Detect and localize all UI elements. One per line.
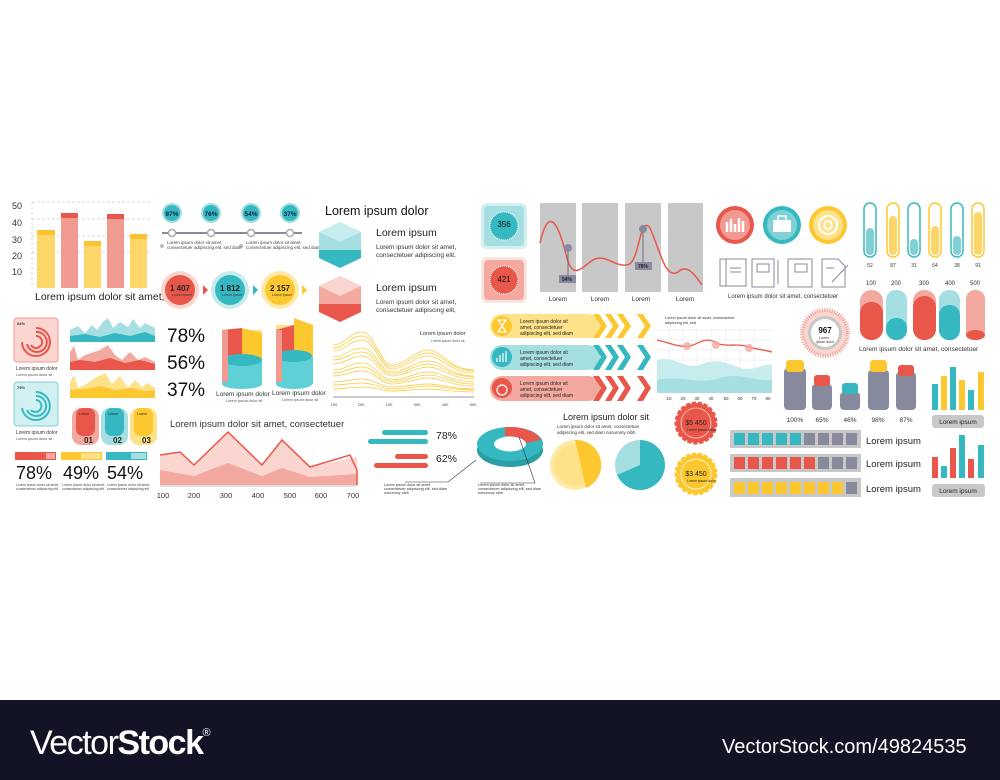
pill bar chart: Lorem ipsum dolor sit amet, consectetuer	[859, 346, 979, 353]
timeline percentages: 54%	[244, 211, 258, 218]
hexagon cubes: Lorem ipsum	[376, 227, 437, 239]
stacked cylinders: 46%	[843, 417, 857, 424]
3d cylinders: Lorem ipsum dolor sit	[282, 398, 319, 402]
pies: Lorem ipsum dolor sit	[563, 412, 650, 422]
grid line chart: Lorem ipsum dolor sit amet, consectetuer	[665, 316, 735, 320]
block progress rows: Lorem ipsum	[866, 484, 921, 495]
3d donut: Lorem ipsum dolor sit amet,	[478, 483, 525, 487]
area line chart bottom: 600	[315, 491, 327, 500]
3d donut: consectetuer adipiscing elit, sed diam	[384, 487, 447, 491]
bar chart: top left: 50	[12, 201, 22, 211]
3d cylinders	[216, 318, 327, 403]
area line chart bottom: 100	[157, 491, 169, 500]
hexagon cubes: Lorem ipsum dolor sit amet,	[376, 299, 456, 306]
block progress rows: Lorem ipsum	[866, 459, 921, 470]
progress bars bottom left: consectetuer adipiscing elit	[16, 487, 58, 491]
arrow rows: Lorem ipsum dolor sit	[520, 319, 568, 325]
price seals: $3 450	[685, 471, 707, 478]
test tubes: 91	[975, 263, 981, 269]
progress bars bottom left: Lorem ipsum dolor sit amet,	[62, 483, 105, 487]
tags 01 02 03: 01	[84, 436, 93, 445]
967 badge: 967	[818, 326, 832, 335]
gray column wave chart: 54%	[562, 277, 573, 283]
area line chart bottom: 300	[220, 491, 232, 500]
number circles 1407 1812 2157: Lorem ipsum	[272, 293, 292, 297]
test tubes	[864, 203, 984, 269]
area line chart bottom: 700	[347, 491, 359, 500]
wave line chart	[331, 331, 477, 407]
tags 01 02 03: Lorem	[137, 412, 147, 416]
hexagon cubes	[319, 222, 456, 322]
bar chart: top left: Lorem ipsum dolor sit amet,	[35, 291, 165, 303]
badge boxes 356 421: 421	[497, 275, 511, 284]
grid line chart: 40	[708, 396, 714, 401]
arrow rows: amet, consectetuer	[520, 325, 563, 331]
grid line chart: 50	[723, 396, 729, 401]
test tubes: 38	[954, 263, 960, 269]
block progress rows: Lorem ipsum	[866, 436, 921, 447]
gray column wave chart	[540, 203, 703, 303]
panel: concentric arcs: 64%	[17, 321, 25, 326]
gray column wave chart: Lorem	[676, 296, 694, 303]
arrow rows	[490, 314, 651, 401]
book icons	[720, 259, 848, 287]
tags 01 02 03: 02	[113, 436, 122, 445]
progress bars bottom left: Lorem ipsum dolor sit amet,	[16, 483, 59, 487]
horizontal bars 78% 62%: 78%	[436, 430, 457, 442]
progress bars bottom left	[15, 452, 150, 491]
bar chart: top left	[12, 201, 165, 303]
footer bar: VectorStock.com/49824535	[722, 736, 967, 758]
pies: adipiscing elit, sed diam nonummy nibh	[557, 430, 636, 435]
tags 01 02 03: Lorem	[108, 412, 118, 416]
3d cylinders: Lorem ipsum dolor sit	[226, 399, 263, 403]
number circles 1407 1812 2157: 1 812	[220, 284, 241, 293]
area line chart bottom: 500	[284, 491, 296, 500]
icon circles	[716, 206, 847, 244]
price seals: $5 450	[685, 420, 707, 427]
pill bar chart: 500	[970, 281, 981, 287]
area line chart bottom: 200	[188, 491, 200, 500]
stacked cylinders: 87%	[899, 417, 913, 424]
progress bars bottom left: consectetuer adipiscing elit	[107, 487, 149, 491]
text: Lorem ipsum dolor sit amet, consectetuer	[728, 294, 838, 300]
price seals: Lorem ipsum dolor	[687, 428, 717, 432]
wave line chart: 500	[470, 402, 477, 407]
bar chart: top left: 30	[12, 235, 22, 245]
hexagon cubes: consectetuer adipiscing elit,	[376, 307, 456, 314]
test tubes: 52	[867, 263, 873, 269]
grid line chart	[657, 316, 772, 401]
tags 01 02 03: Lorem	[79, 412, 89, 416]
panel: concentric arcs: Lorem ipsum dolor sit	[16, 437, 53, 441]
grid line chart: 60	[737, 396, 743, 401]
stacked cylinders: 65%	[815, 417, 829, 424]
gray column wave chart: Lorem	[591, 296, 609, 303]
price seals	[676, 403, 717, 494]
967 badge	[802, 310, 848, 356]
horizontal bars 78% 62%: 62%	[436, 453, 457, 465]
panel: concentric arcs: Lorem ipsum dolor	[16, 366, 58, 372]
wave line chart: 100	[386, 402, 393, 407]
area line chart bottom: Lorem ipsum dolor sit amet, consectetuer	[170, 419, 344, 430]
big percentages: 78%	[167, 326, 205, 347]
arrow rows: amet, consectetuer	[520, 387, 563, 393]
panel: concentric arcs: Lorem ipsum dolor	[16, 430, 58, 436]
timeline percentages: 76%	[204, 211, 218, 218]
timeline percentages: consectetuer adipiscing elit, sed diam	[167, 245, 242, 250]
3d cylinders: Lorem ipsum dolor	[272, 390, 327, 397]
progress bars bottom left: consectetuer adipiscing elit	[62, 487, 104, 491]
967 badge: Lorem	[819, 336, 829, 340]
timeline percentages: 87%	[165, 211, 179, 218]
wave line chart: Lorem ipsum dolor sit	[431, 339, 464, 343]
small bar charts	[932, 367, 985, 497]
grid line chart: 70	[751, 396, 757, 401]
hexagon cubes: Lorem ipsum dolor sit amet,	[376, 244, 456, 251]
test tubes: 31	[911, 263, 917, 269]
small bar charts: Lorem ipsum	[939, 419, 977, 426]
bar chart: top left: 10	[12, 267, 22, 277]
grid line chart: adipiscing elit, sed	[665, 321, 696, 325]
timeline percentages	[160, 203, 321, 250]
big percentages: 56%	[167, 353, 205, 374]
hexagon cubes: consectetuer adipiscing elit,	[376, 252, 456, 259]
3d donut: Lorem ipsum dolor sit amet,	[384, 483, 431, 487]
pill bar chart: 100	[866, 281, 877, 287]
badge boxes 356 421: 356	[497, 220, 511, 229]
timeline percentages: consectetuer adipiscing elit, sed diam	[246, 245, 321, 250]
progress bars bottom left: 54%	[107, 463, 143, 483]
progress bars bottom left: Lorem ipsum dolor sit amet,	[107, 483, 150, 487]
gray column wave chart: 78%	[638, 264, 649, 270]
footer bar: ®	[202, 727, 210, 739]
panel: concentric arcs	[14, 318, 58, 441]
grid line chart: 80	[765, 396, 771, 401]
panel: concentric arcs: Lorem ipsum dolor sit	[16, 373, 53, 377]
gray column wave chart: Lorem	[549, 296, 567, 303]
grid line chart: 20	[680, 396, 686, 401]
timeline percentages: Lorem ipsum dolor sit amet,	[167, 240, 223, 245]
heading: Lorem ipsum dolor: Lorem ipsum dolor	[325, 204, 429, 218]
badge boxes 356 421	[481, 203, 527, 303]
wave line chart: 200	[358, 402, 365, 407]
arrow rows: amet, consectetuer	[520, 356, 563, 362]
pies: Lorem ipsum dolor sit amet, consectetuer	[557, 424, 640, 429]
big percentages	[167, 326, 205, 401]
3d donut: nonummy nibh	[384, 491, 409, 495]
number circles 1407 1812 2157: 2 157	[270, 284, 291, 293]
gray column wave chart: Lorem	[632, 296, 650, 303]
bar chart: top left: 20	[12, 251, 22, 261]
timeline percentages: 37%	[283, 211, 297, 218]
number circles 1407 1812 2157: 1 407	[170, 284, 191, 293]
grid line chart: 10	[666, 396, 672, 401]
pill bar chart: 400	[945, 281, 956, 287]
3d donut	[384, 427, 543, 495]
test tubes: 87	[890, 263, 896, 269]
area line chart bottom: 400	[252, 491, 264, 500]
pies	[550, 412, 665, 490]
arrow rows: Lorem ipsum dolor sit	[520, 381, 568, 387]
stacked cylinders: 100%	[787, 417, 804, 424]
3d cylinders: Lorem ipsum dolor	[216, 391, 271, 398]
bar chart: top left: 40	[12, 218, 22, 228]
grid line chart: 30	[694, 396, 700, 401]
pill bar chart: 300	[919, 281, 930, 287]
stacked cylinders: 98%	[871, 417, 885, 424]
progress bars bottom left: 78%	[16, 463, 52, 483]
area line chart bottom	[157, 419, 359, 500]
tags 01 02 03: 03	[142, 436, 151, 445]
block progress rows	[730, 430, 921, 497]
small bar charts: Lorem ipsum	[939, 488, 977, 495]
967 badge: ipsum dolor	[816, 340, 835, 344]
progress bars bottom left: 49%	[63, 463, 99, 483]
arrow rows: adipiscing elit, sed diam	[520, 362, 573, 368]
wave line chart: 400	[442, 402, 449, 407]
pill bar chart	[859, 281, 985, 353]
arrow rows: adipiscing elit, sed diam	[520, 393, 573, 399]
test tubes: 64	[932, 263, 938, 269]
arrow rows: Lorem ipsum dolor sit	[520, 350, 568, 356]
hexagon cubes: Lorem ipsum	[376, 282, 437, 294]
timeline percentages: Lorem ipsum dolor sit amet,	[246, 240, 302, 245]
price seals: Lorem ipsum dolor	[687, 479, 717, 483]
3d donut: consectetuer adipiscing elit, sed diam	[478, 487, 541, 491]
stacked cylinders	[784, 360, 916, 424]
wave line chart: 300	[414, 402, 421, 407]
number circles 1407 1812 2157	[161, 271, 307, 309]
wave line chart: 100	[331, 402, 338, 407]
number circles 1407 1812 2157: Lorem ipsum	[172, 293, 192, 297]
arrow rows: adipiscing elit, sed diam	[520, 331, 573, 337]
footer bar	[0, 700, 1000, 780]
area charts small	[70, 318, 155, 398]
3d donut: nonummy nibh	[478, 491, 503, 495]
wave line chart: Lorem ipsum dolor	[420, 331, 466, 337]
tags 01 02 03	[72, 408, 157, 445]
horizontal bars 78% 62%	[368, 430, 457, 468]
panel: concentric arcs: 79%	[17, 385, 25, 390]
big percentages: 37%	[167, 380, 205, 401]
number circles 1407 1812 2157: Lorem ipsum	[222, 293, 242, 297]
pill bar chart: 200	[891, 281, 902, 287]
footer bar: VectorStock	[30, 724, 202, 762]
